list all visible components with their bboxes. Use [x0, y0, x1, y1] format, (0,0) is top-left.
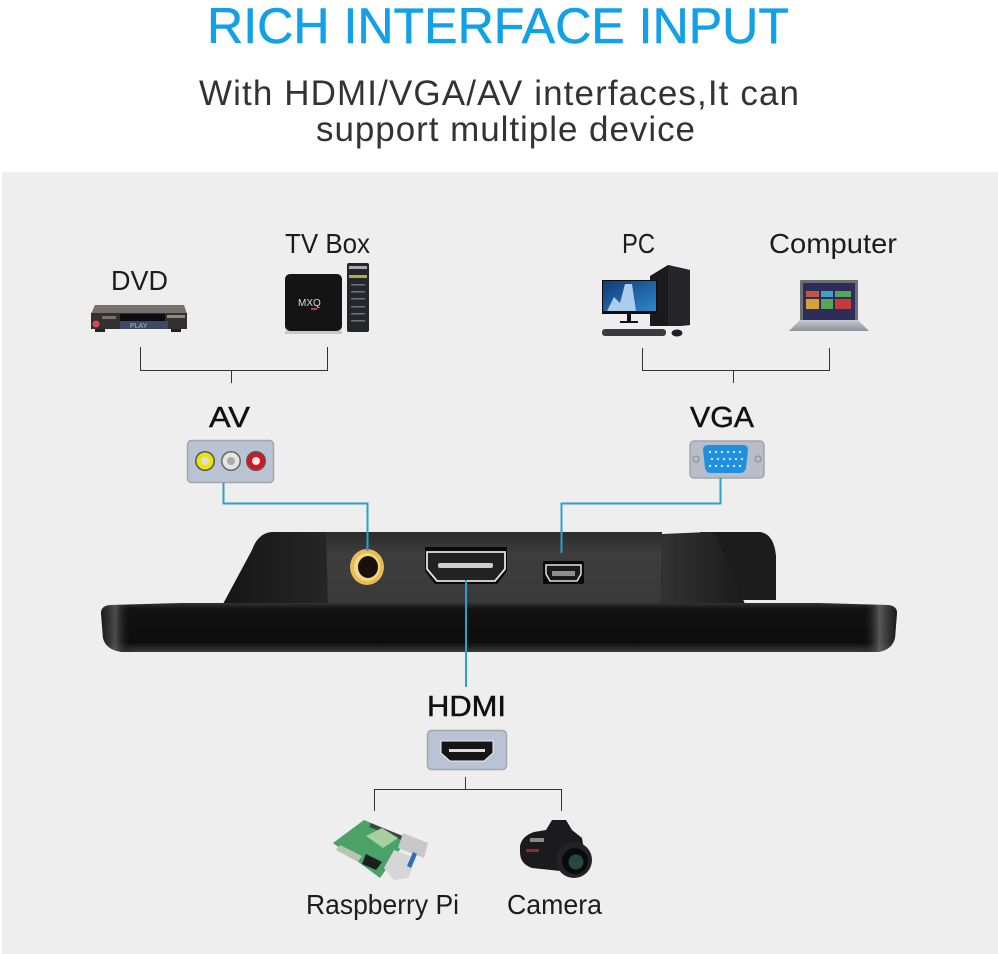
icon: Raspberry Pi [333, 820, 428, 880]
label: Camera: Camera [507, 889, 602, 920]
left shoulder [223, 532, 330, 604]
monitor side view with ports [101, 532, 897, 652]
right shoulder [660, 532, 745, 604]
connector: VGA port to mini USB [562, 478, 720, 553]
subtitle: With HDMI/VGA/AV interfaces,It can [199, 74, 799, 113]
label: VGA: VGA [690, 402, 755, 434]
connector: HDMI port to monitor [465, 580, 467, 687]
subtitle: support multiple device [316, 110, 695, 149]
label: Raspberry Pi: Raspberry Pi [306, 889, 459, 920]
connector: PC and Computer to VGA [642, 348, 830, 383]
icon: VGA port [690, 441, 764, 478]
port: HDMI [425, 547, 507, 584]
port: AV jack [350, 549, 384, 585]
connector: AV port to jack [224, 483, 368, 551]
connector: HDMI to Raspberry Pi and Camera [374, 777, 562, 811]
port plate [326, 532, 662, 604]
label: AV: AV [209, 402, 251, 434]
port: mini USB [543, 561, 584, 584]
icon: TV box and remote: MXQ [298, 298, 321, 309]
icon: DVD player: PLAY [130, 323, 148, 330]
icon: camera [520, 820, 592, 878]
label: TV Box: TV Box [285, 228, 370, 259]
label: HDMI: HDMI [427, 691, 506, 723]
icon: AV port [188, 440, 274, 482]
label: Computer: Computer [769, 228, 897, 259]
icon: desktop PC [602, 265, 690, 336]
rear block [700, 532, 776, 600]
icon: HDMI port [428, 730, 506, 770]
icon: DVD player [91, 305, 187, 332]
label: DVD: DVD [111, 265, 168, 296]
base bar [101, 603, 897, 652]
label: PC: PC [622, 228, 655, 259]
icon: laptop [789, 280, 869, 331]
subtitle [199, 74, 799, 149]
connector: DVD and TV Box to AV [140, 347, 328, 383]
icon: TV box and remote [285, 263, 369, 334]
